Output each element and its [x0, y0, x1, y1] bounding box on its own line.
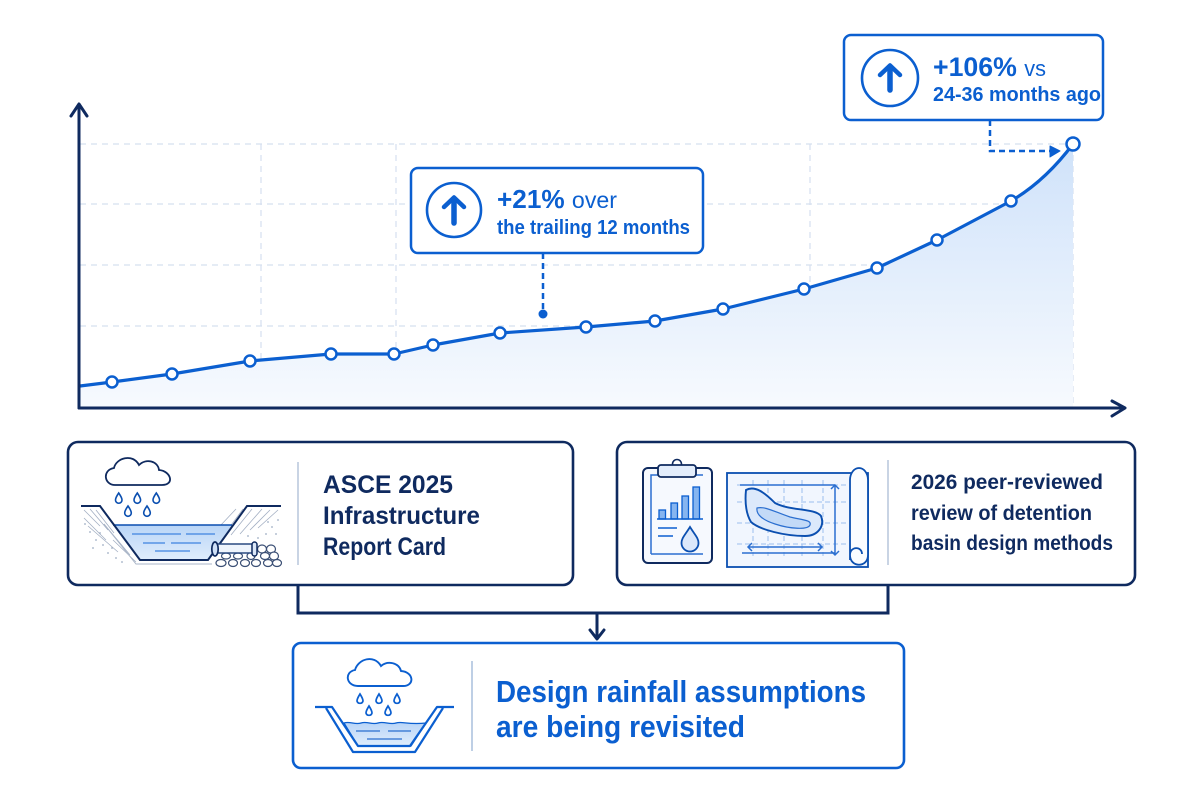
icon: clipboard with bar chart and water drop	[643, 460, 712, 563]
callout text: the trailing 12 months	[497, 217, 690, 239]
area under curve	[80, 144, 1073, 408]
line chart	[71, 104, 1125, 416]
soil texture	[84, 509, 278, 562]
water	[113, 525, 232, 560]
icon: rain over detention basin with outlet pipe	[81, 458, 282, 566]
icon: up arrow	[427, 183, 481, 237]
panel text: Infrastructure	[323, 502, 480, 530]
conclusion text: Design rainfall assumptions	[496, 674, 866, 709]
panel text: ASCE 2025	[323, 471, 453, 499]
outlet pipe	[216, 544, 254, 553]
callout text: +21% over	[497, 184, 617, 214]
basin outline	[81, 506, 281, 560]
callout text	[933, 52, 1101, 106]
panel text	[323, 471, 480, 561]
rocks	[216, 545, 282, 566]
panel text: 2026 peer-reviewed	[911, 471, 1103, 494]
panel text	[911, 471, 1113, 555]
icon: rain over basin	[315, 659, 454, 752]
callout text	[497, 184, 690, 239]
panel text: review of detention	[911, 502, 1092, 525]
callout text: 24-36 months ago	[933, 84, 1101, 106]
rain drops	[116, 493, 160, 516]
icon: blueprint of detention basin	[727, 468, 868, 567]
connector between cards and conclusion	[298, 585, 888, 639]
panel: conclusion	[293, 643, 904, 768]
panel text: Report Card	[323, 533, 446, 561]
data points	[106, 138, 1080, 388]
panel: peer-reviewed detention basin review	[617, 442, 1135, 585]
axes	[71, 104, 1125, 416]
panel: ASCE report card	[68, 442, 573, 585]
callout: +21%	[411, 168, 703, 318]
conclusion text	[496, 674, 866, 744]
callout: +106%	[844, 35, 1103, 157]
callout text: +106% vs	[933, 52, 1046, 82]
cloud	[106, 458, 170, 485]
trend line	[80, 144, 1073, 386]
icon: up arrow	[862, 50, 918, 106]
panel text: basin design methods	[911, 532, 1113, 555]
conclusion text: are being revisited	[496, 709, 745, 744]
